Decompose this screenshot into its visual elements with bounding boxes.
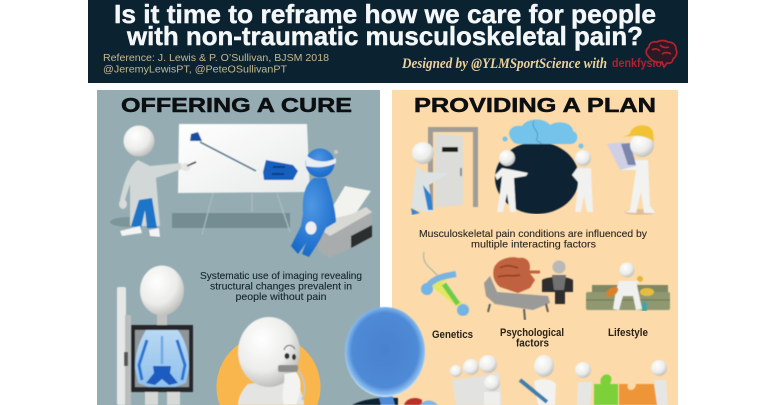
caption: imaging: people without pain bbox=[236, 291, 327, 303]
label: psychological factors: factors bbox=[516, 338, 549, 350]
denkfysio logo bbox=[612, 40, 677, 70]
panel: offering a cure bbox=[97, 90, 380, 405]
dark circle with cloud and two figures bbox=[495, 120, 593, 214]
heading: OFFERING A CURE bbox=[121, 95, 352, 117]
heading: PROVIDING A PLAN bbox=[414, 95, 656, 117]
figure: builder with plans bbox=[607, 125, 656, 215]
icon: people with puzzle pieces bbox=[575, 360, 668, 405]
label: psychological factors bbox=[500, 327, 564, 350]
icon: brain bbox=[646, 40, 677, 67]
caption: imaging: structural changes prevalent in bbox=[210, 280, 352, 292]
icon: group of people bbox=[450, 355, 502, 405]
panel: providing a plan bbox=[392, 90, 678, 405]
reference text: Reference: J. Lewis & P. O’Sullivan, BJSM 2018 bbox=[103, 52, 329, 64]
caption: imaging bbox=[200, 270, 362, 303]
figure: doctor pointing bbox=[110, 126, 196, 237]
label: lifestyle: Lifestyle bbox=[608, 327, 648, 339]
caption: factors bbox=[419, 228, 648, 250]
reference text: @JeremyLewisPT, @PeteOSullivanPT bbox=[103, 64, 288, 76]
icon: person with tool bbox=[520, 355, 556, 405]
caption: imaging: Systematic use of imaging revealing bbox=[200, 270, 362, 282]
title: with non-traumatic musculoskeletal pain? bbox=[126, 21, 643, 51]
title bbox=[114, 0, 656, 51]
caption: factors: Musculoskeletal pain conditions are influenced by bbox=[419, 228, 648, 240]
figure: person at door bbox=[411, 127, 478, 215]
caption: factors: multiple interacting factors bbox=[471, 238, 596, 250]
header banner bbox=[88, 0, 688, 83]
icon: person on sofa bbox=[586, 262, 670, 311]
label: genetics: Genetics bbox=[432, 329, 473, 341]
icon: genetics bbox=[421, 252, 469, 316]
figure: large blue thinker overlapping panels bbox=[345, 307, 438, 405]
reference text bbox=[103, 52, 329, 76]
figure: blue patient on scanner bbox=[291, 148, 372, 258]
figure: x-ray scan bbox=[117, 266, 193, 405]
denkfysio logo: denkfysio bbox=[612, 56, 662, 70]
label: psychological factors: Psychological bbox=[500, 327, 564, 339]
designer credit: Designed by @YLMSportScience with bbox=[401, 56, 607, 72]
whiteboard presentation bbox=[172, 124, 310, 235]
icon: brain on therapy couch bbox=[484, 257, 573, 320]
figure: worried person bbox=[216, 317, 320, 405]
